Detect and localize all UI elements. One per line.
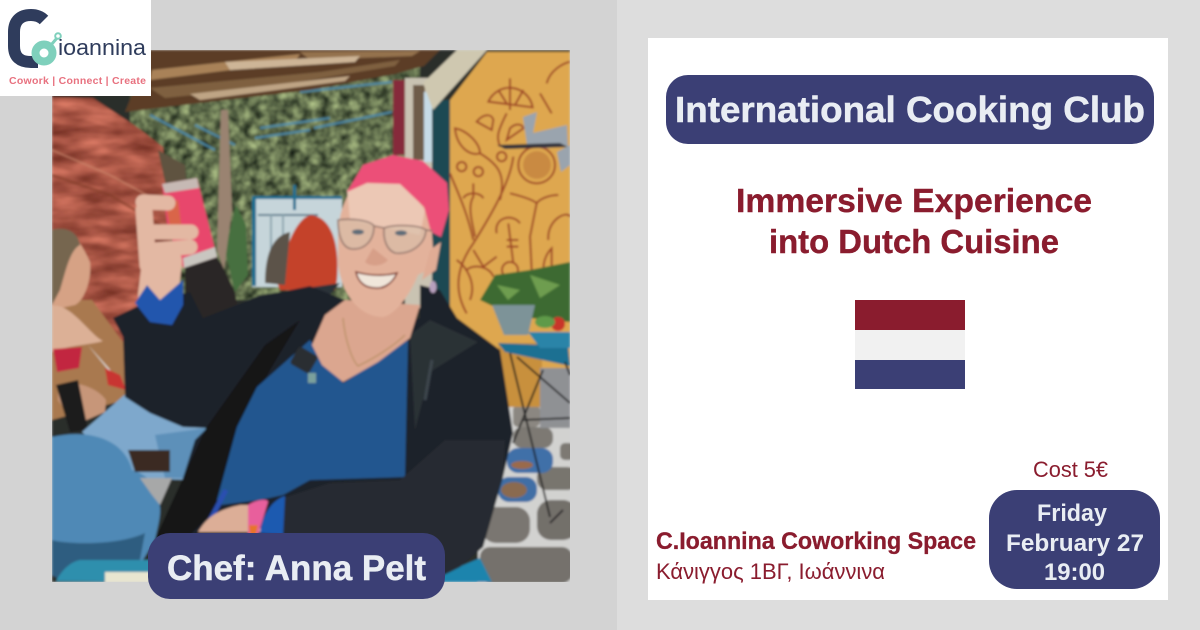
- cream awning: [423, 50, 487, 110]
- teal tray on lap: [56, 560, 160, 582]
- background: left side: [0, 0, 617, 630]
- photo base tone: [52, 50, 570, 582]
- logo tagline: Cowork | Connect | Create: [9, 75, 146, 87]
- ear: [422, 242, 441, 280]
- blue rafters: [150, 82, 392, 150]
- date and time pill: [989, 490, 1160, 589]
- grey bucket behind table: [540, 368, 570, 428]
- wooden slats against wall: [158, 150, 186, 183]
- teal chair: [440, 558, 492, 582]
- foliage backdrop: [130, 50, 420, 300]
- person with grey hair: [265, 232, 290, 285]
- date and time pill: February 27: [1006, 530, 1144, 557]
- timber post: [217, 110, 232, 270]
- nose: [365, 248, 388, 266]
- microphone clip: [289, 346, 319, 383]
- yellow mural wall: [450, 52, 570, 410]
- stone floor: [478, 405, 577, 585]
- woman at left: [52, 229, 126, 432]
- date and time pill: Friday: [1037, 500, 1108, 527]
- brick wall: [52, 96, 170, 343]
- title pill: International Cooking Club: [675, 89, 1145, 130]
- glasses: [338, 219, 433, 253]
- smile: [356, 272, 397, 288]
- chef name pill: [148, 533, 445, 599]
- subtitle: [736, 182, 1092, 260]
- shirt fold shadow: [206, 488, 228, 520]
- chest and neck skin: [312, 300, 420, 382]
- jacket forearm across the body: [284, 441, 504, 574]
- potted plant by the door: [225, 205, 248, 292]
- dark strip under knee: [128, 450, 170, 472]
- title pill: [666, 75, 1154, 144]
- jeans: [52, 390, 207, 580]
- venue name: C.Ioannina Coworking Space: [656, 528, 976, 555]
- logo card: [0, 0, 151, 96]
- eyes: [352, 229, 364, 235]
- background: right side: [617, 0, 1200, 630]
- black jacket body: [112, 284, 514, 538]
- logo mark: C with teal ring: [14, 15, 61, 62]
- wall under the table: [498, 343, 542, 407]
- person behind the glass, dark hair: [184, 256, 238, 302]
- Dutch flag: [855, 300, 965, 389]
- venue address: Κάνιγγος 1ΒΓ, Ιωάννινα: [656, 559, 885, 584]
- logo wordmark: ioannina: [58, 35, 147, 60]
- mural leaf fill: [523, 151, 551, 179]
- blue shirt: [217, 340, 408, 505]
- table with plants: [480, 262, 570, 523]
- cuff and wristwatch hand: [198, 496, 285, 535]
- pink hair: [347, 155, 449, 237]
- necklace: [343, 318, 405, 366]
- chef name pill: Chef: Anna Pelt: [167, 549, 426, 588]
- blue sleeve: [135, 280, 183, 325]
- person with red hair: [249, 214, 340, 300]
- subtitle: Immersive Experience: [736, 182, 1092, 219]
- cost: Cost 5€: [1033, 457, 1108, 482]
- fish ornaments on shelf: [522, 111, 570, 149]
- pink drink glass: [162, 178, 217, 268]
- glass door: [252, 185, 342, 287]
- maroon pillar: [393, 80, 405, 155]
- date and time pill: 19:00: [1044, 559, 1105, 586]
- reed roof: [125, 50, 440, 112]
- subtitle: into Dutch Cuisine: [769, 223, 1059, 260]
- photo: chef raising a pink drink: [52, 50, 577, 585]
- raised hand: [143, 202, 191, 295]
- pale wall and column: [405, 78, 452, 308]
- earring: [430, 281, 436, 293]
- head: [338, 155, 449, 317]
- white event panel: [648, 38, 1168, 600]
